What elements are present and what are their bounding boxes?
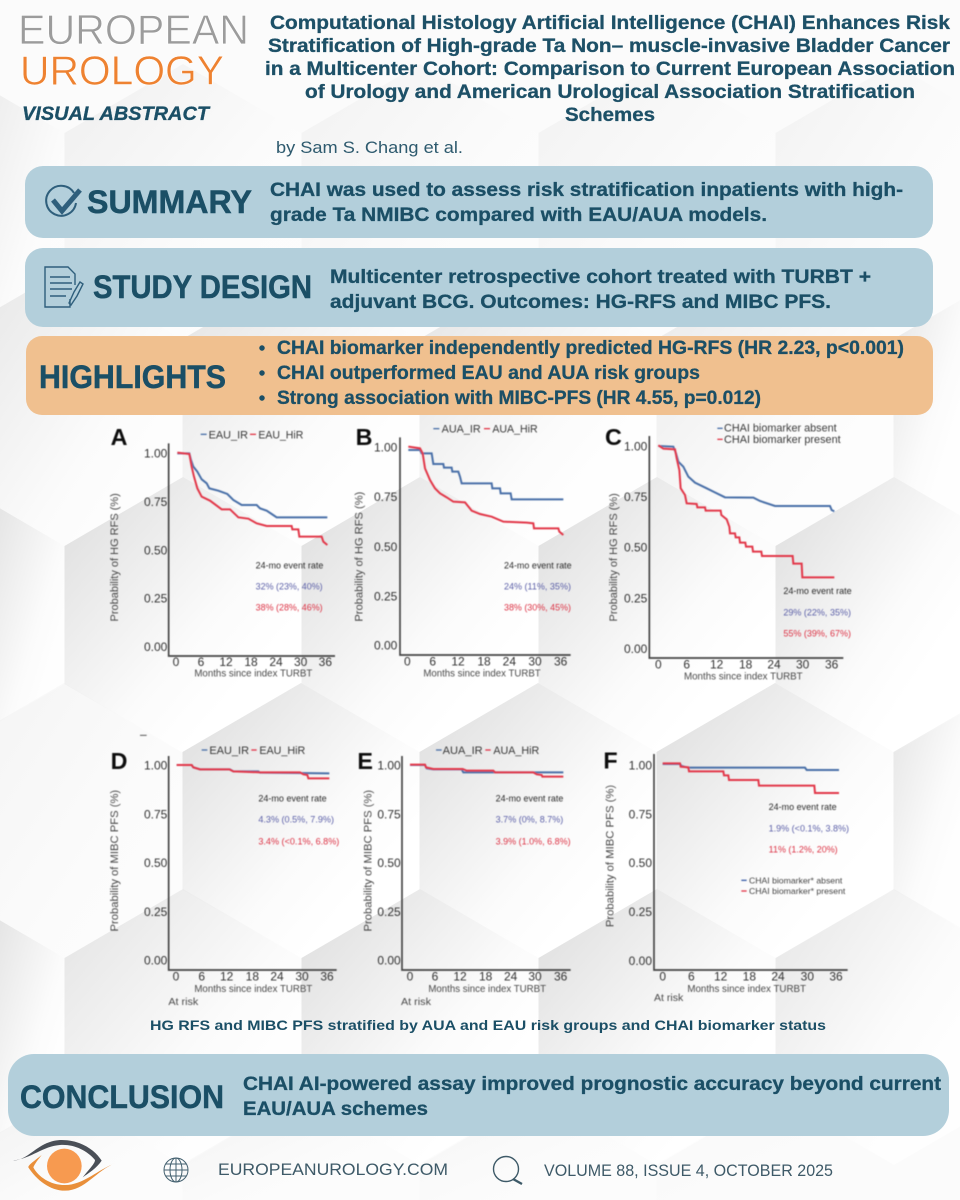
chart C: HG RFS by CHAI biomarker: 1.00 — [624, 439, 648, 453]
highlights bullets — [259, 338, 904, 409]
chart A: HG RFS by EAU risk group: 0 — [173, 655, 180, 669]
chart D: MIBC PFS by EAU risk group: 24 — [270, 969, 284, 983]
chart E: MIBC PFS by AUA risk group: 0.75 — [377, 808, 401, 822]
chart F: MIBC PFS by CHAI biomarker: 36 — [829, 969, 843, 983]
chart D: MIBC PFS by EAU risk group: 0.75 — [144, 808, 168, 822]
icon: checkmark — [46, 186, 80, 216]
chart C: HG RFS by CHAI biomarker: C — [605, 424, 622, 450]
logo: European Urology — [18, 6, 249, 94]
chart D: MIBC PFS by EAU risk group: 3.4% (<0.1%, 6.8%) — [258, 836, 339, 846]
icon: document with pencil — [45, 267, 83, 307]
chart E: MIBC PFS by AUA risk group: E — [357, 748, 373, 774]
chart B: HG RFS by AUA risk group: AUA_HiR — [492, 423, 538, 435]
chart A: HG RFS by EAU risk group: 0.75 — [144, 495, 168, 509]
chart C: HG RFS by CHAI biomarker: 29% (22%, 35%) — [783, 608, 851, 618]
chart E: MIBC PFS by AUA risk group: At risk — [401, 997, 431, 1008]
chart E: MIBC PFS by AUA risk group: AUA_IR — [443, 745, 483, 757]
summary text — [270, 180, 903, 226]
chart D: MIBC PFS by EAU risk group: D — [111, 748, 128, 774]
chart A: HG RFS by EAU risk group: 1.00 — [144, 447, 168, 461]
chart E: MIBC PFS by AUA risk group: 0.50 — [377, 856, 401, 870]
chart C: HG RFS by CHAI biomarker: 0.25 — [624, 591, 648, 605]
chart C: HG RFS by CHAI biomarker: Probability of HG RFS (%) — [608, 493, 620, 621]
title: Stratification of High-grade Ta Non– muscle-invasive Bladder Cancer — [268, 36, 951, 57]
summary heading: SUMMARY — [87, 184, 252, 220]
chart F: MIBC PFS by CHAI biomarker: Months since index TURBT — [687, 984, 806, 995]
chart A: HG RFS by EAU risk group: 12 — [219, 655, 233, 669]
chart B: HG RFS by AUA risk group: B — [356, 424, 373, 450]
conclusion text: CHAI AI-powered assay improved prognostic accuracy beyond current — [243, 1074, 942, 1095]
chart A: HG RFS by EAU risk group: Months since index TURBT — [194, 669, 312, 680]
chart A: HG RFS by EAU risk group: 30 — [294, 655, 308, 669]
study design heading: STUDY DESIGN — [93, 269, 312, 305]
chart E: MIBC PFS by AUA risk group: AUA_HiR — [493, 745, 539, 757]
chart E: MIBC PFS by AUA risk group: 24-mo event rate — [496, 794, 563, 804]
chart E: MIBC PFS by AUA risk group: 0 — [407, 969, 414, 983]
chart A: HG RFS by EAU risk group: EAU_HiR — [258, 429, 303, 441]
chart C: HG RFS by CHAI biomarker: CHAI biomarker absent — [724, 423, 837, 435]
chart A: HG RFS by EAU risk group: 32% (23%, 40%) — [256, 581, 323, 591]
chart C: HG RFS by CHAI biomarker: 0.75 — [624, 490, 648, 504]
chart D: MIBC PFS by EAU risk group: 24-mo event rate — [258, 794, 327, 804]
summary text: CHAI was used to assess risk stratification inpatients with high- — [270, 180, 903, 201]
chart D: MIBC PFS by EAU risk group: 12 — [220, 969, 234, 983]
chart C: HG RFS by CHAI biomarker: 0 — [655, 658, 662, 672]
chart D: MIBC PFS by EAU risk group: 36 — [320, 969, 334, 983]
chart B: HG RFS by AUA risk group: 30 — [528, 655, 542, 669]
chart E: MIBC PFS by AUA risk group: 0.00 — [377, 953, 401, 967]
chart B: HG RFS by AUA risk group: 24-mo event rate — [504, 560, 572, 570]
panel: highlights — [26, 336, 933, 415]
chart A: HG RFS by EAU risk group: 0.50 — [144, 543, 168, 557]
chart C: HG RFS by CHAI biomarker: 36 — [825, 658, 839, 672]
chart E: MIBC PFS by AUA risk group: 6 — [432, 969, 439, 983]
chart C: HG RFS by CHAI biomarker: Months since index TURBT — [684, 671, 803, 682]
chart D: MIBC PFS by EAU risk group: 6 — [198, 969, 205, 983]
chart E: MIBC PFS by AUA risk group: 3.9% (1.0%, 6.8%) — [496, 836, 571, 846]
icon: globe — [164, 1158, 188, 1182]
chart D: MIBC PFS by EAU risk group: Probability of MIBC PFS (%) — [109, 790, 121, 931]
chart F: MIBC PFS by CHAI biomarker: F — [603, 747, 618, 773]
chart A: HG RFS by EAU risk group: 0.00 — [144, 640, 168, 654]
chart C: HG RFS by CHAI biomarker: 24-mo event rate — [783, 586, 852, 596]
chart F: MIBC PFS by CHAI biomarker: 0.50 — [629, 856, 652, 870]
study design text — [330, 267, 871, 313]
title: Computational Histology Artificial Intelligence (CHAI) Enhances Risk — [270, 13, 950, 34]
chart A: HG RFS by EAU risk group: 24-mo event rate — [256, 560, 323, 570]
chart F: MIBC PFS by CHAI biomarker: 24 — [771, 969, 785, 983]
chart A: HG RFS by EAU risk group: Probability of HG RFS (%) — [109, 493, 121, 621]
author byline: by Sam S. Chang et al. — [276, 138, 463, 157]
highlights bullets: Strong association with MIBC-PFS (HR 4.55, p=0.012) — [277, 388, 761, 409]
chart E: MIBC PFS by AUA risk group: 0.25 — [377, 905, 401, 919]
chart C: HG RFS by CHAI biomarker: 6 — [683, 658, 690, 672]
chart E: MIBC PFS by AUA risk group — [357, 745, 571, 1008]
chart caption: HG RFS and MIBC PFS stratified by AUA and EAU risk groups and CHAI biomarker status — [150, 1017, 826, 1033]
chart F: MIBC PFS by CHAI biomarker: 1.9% (<0.1%, 3.8%) — [769, 823, 849, 833]
logo: European Urology: EUROPEAN — [18, 6, 249, 53]
chart B: HG RFS by AUA risk group: 0 — [404, 655, 411, 669]
volume reference: VOLUME 88, ISSUE 4, OCTOBER 2025 — [544, 1161, 833, 1180]
chart E: MIBC PFS by AUA risk group: Probability of MIBC PFS (%) — [362, 790, 374, 931]
chart E: MIBC PFS by AUA risk group: 1.00 — [377, 758, 401, 772]
panel: summary — [25, 166, 933, 238]
chart B: HG RFS by AUA risk group: 36 — [554, 655, 568, 669]
chart D: MIBC PFS by EAU risk group: 0 — [173, 969, 180, 983]
chart F: MIBC PFS by CHAI biomarker: 0.75 — [629, 808, 652, 822]
chart C: HG RFS by CHAI biomarker: CHAI biomarker present — [724, 434, 841, 446]
chart A: HG RFS by EAU risk group: EAU_IR — [209, 429, 248, 441]
chart D: MIBC PFS by EAU risk group: 1.00 — [144, 758, 168, 772]
study design text: adjuvant BCG. Outcomes: HG-RFS and MIBC PFS. — [330, 292, 831, 313]
chart C: HG RFS by CHAI biomarker: 24 — [767, 658, 781, 672]
chart F: MIBC PFS by CHAI biomarker: 18 — [743, 969, 756, 983]
chart D: MIBC PFS by EAU risk group: 0.25 — [144, 905, 168, 919]
chart C: HG RFS by CHAI biomarker: 55% (39%, 67%) — [783, 629, 851, 639]
chart B: HG RFS by AUA risk group — [354, 423, 572, 680]
chart B: HG RFS by AUA risk group: 0.00 — [374, 639, 398, 653]
website: EUROPEANUROLOGY.COM — [218, 1160, 448, 1179]
chart B: HG RFS by AUA risk group: Months since index TURBT — [423, 669, 541, 680]
chart C: HG RFS by CHAI biomarker: 12 — [710, 658, 724, 672]
chart F: MIBC PFS by CHAI biomarker: 12 — [714, 969, 728, 983]
icon: magnifier — [494, 1156, 522, 1184]
chart F: MIBC PFS by CHAI biomarker — [603, 747, 849, 1004]
chart A: HG RFS by EAU risk group: 38% (28%, 46%) — [256, 603, 323, 613]
chart F: MIBC PFS by CHAI biomarker: 30 — [801, 969, 814, 983]
chart F: MIBC PFS by CHAI biomarker: 6 — [688, 969, 695, 983]
chart B: HG RFS by AUA risk group: 6 — [429, 655, 436, 669]
chart D: MIBC PFS by EAU risk group: EAU_IR — [209, 745, 249, 757]
chart A: HG RFS by EAU risk group — [109, 424, 335, 680]
highlights bullets: CHAI outperformed EAU and AUA risk groups — [277, 363, 700, 384]
chart B: HG RFS by AUA risk group: 38% (30%, 45%) — [504, 603, 571, 613]
chart F: MIBC PFS by CHAI biomarker: 0.25 — [629, 905, 652, 919]
chart D: MIBC PFS by EAU risk group: Months since index TURBT — [194, 984, 312, 995]
title: in a Multicenter Cohort: Comparison to Current European Association — [265, 59, 955, 80]
chart E: MIBC PFS by AUA risk group: 30 — [528, 969, 542, 983]
chart B: HG RFS by AUA risk group: Probability of HG RFS (%) — [354, 492, 366, 622]
chart E: MIBC PFS by AUA risk group: 3.7% (0%, 8.7%) — [496, 815, 563, 825]
chart B: HG RFS by AUA risk group: 12 — [451, 655, 465, 669]
chart F: MIBC PFS by CHAI biomarker: 24-mo event rate — [769, 802, 837, 812]
chart F: MIBC PFS by CHAI biomarker: Probability of MIBC PFS (%) — [604, 785, 616, 927]
chart E: MIBC PFS by AUA risk group: 36 — [554, 969, 568, 983]
chart D: MIBC PFS by EAU risk group: At risk — [168, 997, 198, 1008]
chart D: MIBC PFS by EAU risk group — [109, 735, 339, 1008]
chart E: MIBC PFS by AUA risk group: 24 — [504, 969, 518, 983]
chart D: MIBC PFS by EAU risk group: 0.00 — [144, 953, 168, 967]
chart C: HG RFS by CHAI biomarker: 30 — [796, 658, 810, 672]
chart B: HG RFS by AUA risk group: 18 — [477, 655, 491, 669]
chart A: HG RFS by EAU risk group: A — [111, 424, 128, 450]
chart B: HG RFS by AUA risk group: 0.75 — [374, 490, 398, 504]
chart D: MIBC PFS by EAU risk group: EAU_HiR — [259, 745, 305, 757]
panel: study design — [25, 248, 933, 327]
chart F: MIBC PFS by CHAI biomarker: 1.00 — [629, 758, 652, 772]
chart E: MIBC PFS by AUA risk group: Months since index TURBT — [428, 984, 546, 995]
chart B: HG RFS by AUA risk group: 24 — [503, 655, 516, 669]
chart B: HG RFS by AUA risk group: 1.00 — [374, 441, 398, 455]
panel: conclusion — [8, 1054, 949, 1136]
chart A: HG RFS by EAU risk group: 18 — [244, 655, 258, 669]
chart B: HG RFS by AUA risk group: 24% (11%, 35%) — [504, 581, 571, 591]
chart C: HG RFS by CHAI biomarker: 0.50 — [624, 541, 648, 555]
chart B: HG RFS by AUA risk group: 0.50 — [374, 540, 398, 554]
chart F: MIBC PFS by CHAI biomarker: 11% (1.2%, 20%) — [769, 845, 838, 855]
chart B: HG RFS by AUA risk group: 0.25 — [374, 589, 398, 603]
conclusion heading: CONCLUSION — [20, 1079, 224, 1115]
highlights bullets: CHAI biomarker independently predicted HG-RFS (HR 2.23, p<0.001) — [277, 338, 904, 359]
icon: eye logo — [13, 1140, 115, 1191]
chart C: HG RFS by CHAI biomarker: 0.00 — [624, 642, 648, 656]
chart D: MIBC PFS by EAU risk group: 0.50 — [144, 856, 168, 870]
chart A: HG RFS by EAU risk group: 24 — [269, 655, 283, 669]
conclusion text — [243, 1074, 942, 1120]
chart F: MIBC PFS by CHAI biomarker: 0.00 — [629, 954, 652, 968]
conclusion text: EAU/AUA schemes — [243, 1099, 428, 1120]
chart A: HG RFS by EAU risk group: 6 — [198, 655, 205, 669]
chart A: HG RFS by EAU risk group: 0.25 — [144, 592, 168, 606]
summary text: grade Ta NMIBC compared with EAU/AUA models. — [270, 205, 767, 226]
chart F: MIBC PFS by CHAI biomarker: CHAI biomarker* present — [749, 886, 846, 896]
chart C: HG RFS by CHAI biomarker: 18 — [739, 658, 753, 672]
chart F: MIBC PFS by CHAI biomarker: At risk — [654, 993, 683, 1004]
chart D: MIBC PFS by EAU risk group: 18 — [246, 969, 259, 983]
chart F: MIBC PFS by CHAI biomarker: CHAI biomarker* absent — [749, 875, 843, 885]
chart A: HG RFS by EAU risk group: 36 — [319, 655, 332, 669]
chart C: HG RFS by CHAI biomarker — [605, 423, 852, 682]
study design text: Multicenter retrospective cohort treated with TURBT + — [330, 267, 871, 288]
chart B: HG RFS by AUA risk group: AUA_IR — [442, 423, 481, 435]
chart F: MIBC PFS by CHAI biomarker: 0 — [659, 969, 666, 983]
logo: European Urology: UROLOGY — [20, 48, 224, 94]
highlights heading: HIGHLIGHTS — [39, 359, 226, 395]
title — [265, 13, 955, 126]
title: Schemes — [565, 105, 655, 126]
visual abstract label: VISUAL ABSTRACT — [22, 104, 210, 125]
chart E: MIBC PFS by AUA risk group: 12 — [453, 969, 467, 983]
chart D: MIBC PFS by EAU risk group: 4.3% (0.5%, 7.9%) — [258, 815, 334, 825]
title: of Urology and American Urological Association Stratification — [305, 82, 915, 103]
chart E: MIBC PFS by AUA risk group: 18 — [479, 969, 493, 983]
chart D: MIBC PFS by EAU risk group: 30 — [295, 969, 309, 983]
